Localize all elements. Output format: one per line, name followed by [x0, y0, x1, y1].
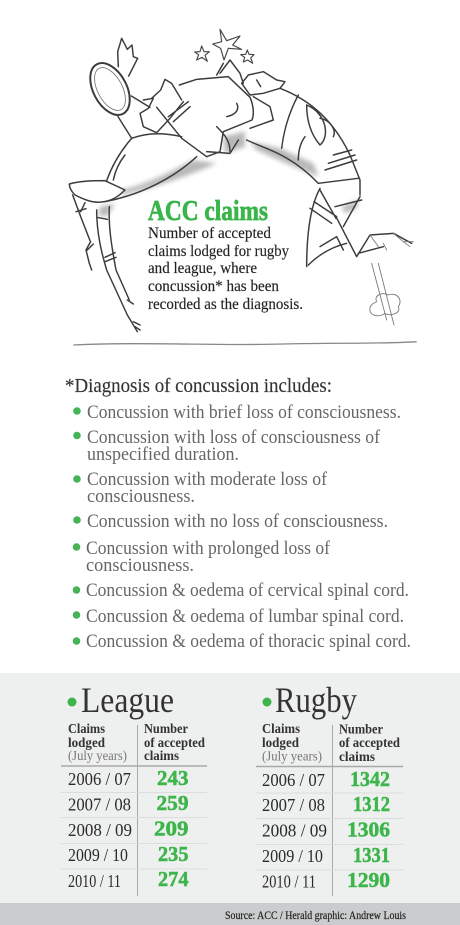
list: concussion diagnoses: Concussion with brief loss of consciousness.	[87, 403, 401, 423]
claim counts: 259	[156, 791, 188, 815]
claim counts: 274	[158, 867, 189, 891]
left player's raised hand and arm	[118, 38, 150, 138]
list: concussion diagnoses: Concussion & oedema of thoracic spinal cord.	[86, 632, 411, 652]
column headers: Number	[339, 722, 383, 736]
icon: impact stars	[195, 29, 254, 63]
column headers	[68, 721, 205, 763]
claim counts: 1290	[347, 868, 390, 892]
column headers: lodged	[262, 735, 299, 750]
list: concussion diagnoses: Concussion with no loss of consciousness.	[87, 512, 388, 532]
left player's shorts and legs	[69, 181, 137, 332]
list: concussion diagnoses: Concussion & oedema of lumbar spinal cord.	[86, 607, 404, 627]
list: concussion diagnoses	[73, 403, 411, 652]
column headers: Claims	[262, 721, 300, 736]
table: Rugby	[256, 680, 403, 896]
claim counts: 1331	[353, 843, 390, 867]
title: ACC claims: ACC claims	[148, 196, 268, 227]
years: 2010 / 11	[262, 872, 316, 892]
years	[262, 770, 327, 892]
central hand and sleeve	[140, 79, 190, 133]
shading on the players	[98, 132, 358, 217]
table: League	[61, 680, 207, 896]
column headers: claims	[144, 748, 179, 763]
table rules	[61, 725, 207, 896]
right player's jersey	[247, 88, 360, 195]
list: concussion diagnoses: unspecified duration.	[87, 445, 239, 465]
list: concussion diagnoses: Concussion with prolonged loss of	[86, 539, 331, 559]
years: 2008 / 09	[262, 820, 327, 840]
motion lines and dust cloud	[370, 263, 400, 325]
years: 2006 / 07	[262, 770, 325, 790]
column headers: of accepted	[339, 735, 400, 750]
column headers: claims	[339, 749, 375, 764]
column headers: (July years)	[262, 748, 322, 764]
claim counts: 235	[158, 842, 188, 866]
intro text: claims lodged for rugby	[148, 243, 289, 260]
right player's legs	[307, 188, 412, 267]
years: 2009 / 10	[68, 845, 128, 865]
column headers: Claims	[68, 721, 105, 736]
central arm and shoulder	[157, 77, 273, 157]
years: 2010 / 11	[68, 871, 121, 891]
table rules	[256, 725, 403, 896]
list: concussion diagnoses: Concussion & oedema of cervical spinal cord.	[86, 581, 409, 601]
years	[68, 769, 132, 891]
illustration: two rugby players colliding	[69, 29, 417, 345]
claim counts	[154, 766, 189, 891]
left player's foot and hand detail	[86, 242, 140, 330]
years: 2006 / 07	[68, 769, 131, 789]
bullet dots	[73, 407, 81, 645]
column headers: of accepted	[144, 735, 205, 750]
heading: Rugby: Rugby	[275, 680, 357, 720]
icon: rugby ball	[82, 56, 138, 122]
source credit: Source: ACC / Herald graphic: Andrew Louis	[225, 910, 406, 922]
column headers: (July years)	[68, 748, 127, 763]
years: 2007 / 08	[68, 794, 131, 814]
right player's head	[217, 60, 285, 95]
claim counts	[347, 767, 390, 892]
years: 2009 / 10	[262, 846, 323, 866]
right player's foot	[370, 233, 413, 250]
intro text	[148, 225, 303, 313]
ground line	[73, 342, 417, 345]
claim counts: 1306	[347, 818, 390, 842]
years: 2007 / 08	[262, 795, 325, 815]
claim counts: 1312	[353, 792, 390, 816]
list: concussion diagnoses: Concussion with loss of consciousness of	[87, 428, 381, 448]
list: concussion diagnoses: consciousness.	[86, 556, 194, 576]
footer bar	[0, 903, 460, 925]
intro text: recorded as the diagnosis.	[148, 296, 303, 313]
heading: diagnosis of concussion: *Diagnosis of concussion includes:	[65, 376, 332, 397]
right player's stripes	[318, 150, 358, 183]
list: concussion diagnoses: consciousness.	[87, 487, 195, 507]
years: 2008 / 09	[68, 820, 132, 840]
column headers: lodged	[68, 735, 105, 750]
list: concussion diagnoses: Concussion with moderate loss of	[87, 470, 328, 490]
intro text: concussion* has been	[148, 278, 279, 295]
claim counts: 209	[154, 816, 188, 840]
panel: data tables background	[0, 673, 460, 903]
claim counts: 243	[157, 766, 188, 790]
heading: League: League	[81, 680, 174, 720]
left player's torso	[105, 134, 197, 202]
intro text: Number of accepted	[148, 225, 271, 242]
column headers	[262, 721, 400, 764]
column headers: Number	[144, 721, 188, 736]
claim counts: 1342	[350, 767, 390, 791]
intro text: and league, where	[148, 260, 257, 277]
